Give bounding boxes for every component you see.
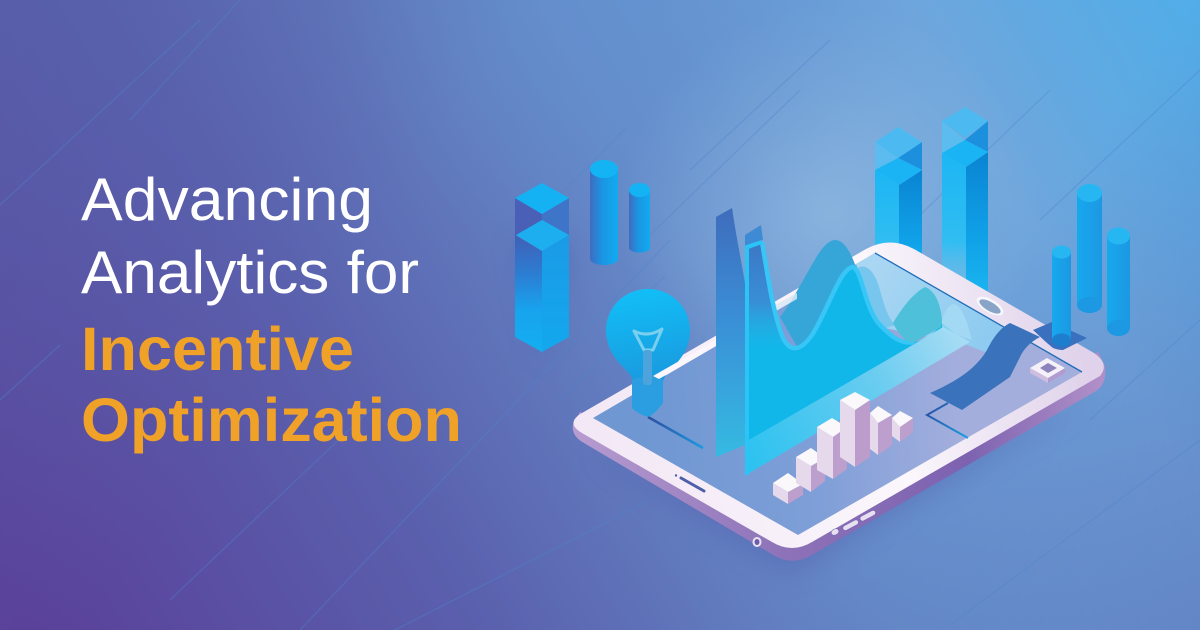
isometric bar chart on tablet: [773, 392, 913, 504]
bulb projection line: [648, 417, 703, 448]
filament: [634, 329, 662, 350]
tablet side edge: [573, 352, 1105, 561]
isometric column: back bar one: [875, 127, 922, 290]
isometric column: left square bar: [515, 183, 575, 365]
wave crest band: [762, 242, 915, 348]
home speaker: [681, 478, 704, 491]
tablet screen: [593, 253, 1082, 535]
bar 3: [817, 418, 847, 479]
teal hump: [893, 287, 942, 343]
side buttons: [830, 509, 876, 537]
bezel strip in front of bulb: [653, 340, 716, 379]
back wave: [780, 240, 880, 352]
title line: Advancing: Advancing: [81, 166, 373, 233]
screen pale region: [856, 253, 1012, 352]
bar 4: [840, 392, 870, 467]
tablet: [573, 242, 1105, 561]
filament stem: [643, 350, 652, 385]
bar 6: [892, 411, 913, 442]
isometric column: right far cylinder: [1107, 228, 1130, 336]
pale wave strip: [857, 267, 895, 330]
back sheet: [716, 208, 745, 457]
tablet shadow: [590, 400, 1090, 575]
pale hump: [942, 304, 972, 340]
isometric column: short cylinder: [629, 183, 650, 252]
title: [81, 166, 462, 454]
jack port: [752, 537, 762, 547]
isometric column: tall cylinder: [590, 160, 618, 265]
sheet top tab: [745, 225, 763, 247]
isometric column: right tall cylinder: [1077, 184, 1102, 313]
title line: Optimization: Optimization: [81, 386, 462, 454]
bulb glass: [606, 289, 690, 382]
bar 2: [796, 448, 825, 492]
camera notch: [974, 293, 1006, 319]
area chart: [716, 208, 972, 475]
bulb base: [632, 376, 663, 417]
isometric column: back bar two: [942, 107, 988, 300]
bar 1: [773, 473, 803, 504]
dark ribbon chart: [930, 322, 1087, 410]
translucent bezel: [757, 293, 797, 320]
tablet bezel: [574, 242, 1104, 548]
sheet frame: [747, 242, 762, 475]
title line: Incentive: Incentive: [81, 315, 354, 383]
front sheet fill: [745, 242, 967, 475]
inner blue panel: [749, 244, 783, 362]
bar 5: [870, 406, 892, 455]
screen inner edge: [875, 253, 1082, 372]
light bulb icon: [606, 289, 703, 448]
ribbon connector line: [927, 403, 968, 438]
title line: Analytics for: Analytics for: [81, 239, 419, 306]
square marker icon: [1030, 358, 1065, 383]
speaker dot: [675, 474, 677, 477]
lower light strip: [746, 327, 970, 475]
right cylinder on tablet: [1052, 246, 1071, 346]
